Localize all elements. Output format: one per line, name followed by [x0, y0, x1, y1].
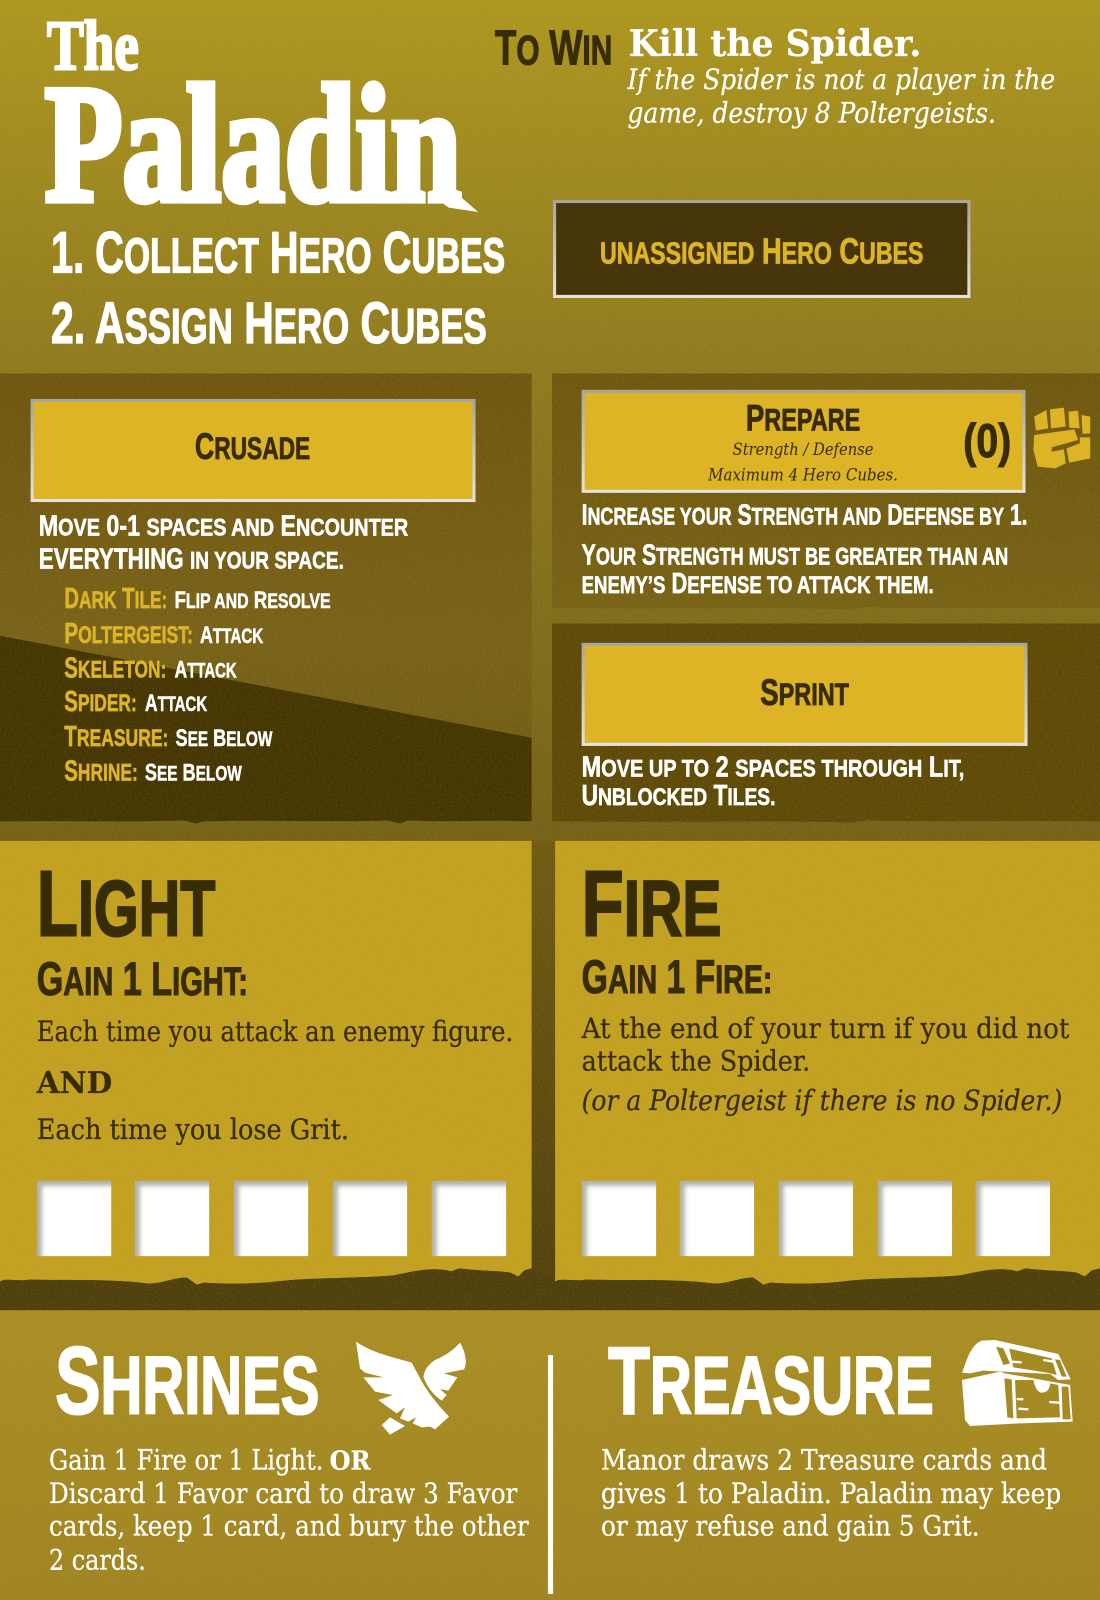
divider — [548, 1355, 553, 1594]
panel: bottom background — [0, 1310, 1100, 1600]
treasure text — [601, 1444, 1061, 1543]
light rules: AND — [36, 1065, 112, 1100]
crusade description — [39, 511, 409, 575]
icon: treasure chest — [962, 1340, 1073, 1426]
light rules: Each time you attack an enemy figure. — [37, 1016, 513, 1048]
panel: sprint background — [552, 623, 1100, 822]
sprint description: MOVE UP TO 2 SPACES THROUGH LIT, — [582, 752, 964, 784]
panel: light background — [0, 841, 532, 1285]
crusade description: MOVE 0-1 SPACES AND ENCOUNTER — [39, 511, 409, 543]
prepare card: Maximum 4 Hero Cubes. — [707, 466, 898, 485]
panel: shrines — [49, 1327, 529, 1576]
unassigned hero cubes box: UNASSIGNED HERO CUBES — [600, 231, 923, 271]
title — [45, 6, 477, 237]
light cube slots — [37, 1181, 513, 1263]
shrines text: OR — [330, 1445, 371, 1476]
encounter list: SEE BELOW — [145, 760, 242, 787]
panel: treasure — [601, 1327, 1073, 1543]
unassigned hero cubes box — [555, 202, 969, 296]
prepare description: INCREASE YOUR STRENGTH AND DEFENSE BY 1. — [582, 499, 1028, 531]
icon: eagle — [356, 1342, 466, 1435]
treasure text: or may refuse and gain 5 Grit. — [601, 1511, 980, 1543]
title: Paladin — [45, 52, 461, 237]
fire rules: (or a Poltergeist if there is no Spider.) — [582, 1085, 1062, 1117]
shrines text: Discard 1 Favor card to draw 3 Favor — [49, 1478, 518, 1510]
sprint description — [582, 752, 964, 812]
steps: 1. COLLECT HERO CUBES — [51, 220, 505, 285]
shrines text: Gain 1 Fire or 1 Light. — [49, 1444, 323, 1476]
encounter list: FLIP AND RESOLVE — [174, 587, 331, 614]
steps — [51, 220, 505, 356]
prepare card: PREPARE — [746, 398, 860, 439]
shrines text: 2 cards. — [49, 1544, 146, 1576]
encounter list: ATTACK — [174, 657, 237, 684]
shrines heading: SHRINES — [55, 1327, 319, 1434]
treasure text: gives 1 to Paladin. Paladin may keep — [601, 1478, 1061, 1510]
crusade card — [32, 401, 474, 501]
fire rules: At the end of your turn if you did not — [581, 1013, 1069, 1045]
encounter list: SEE BELOW — [176, 725, 273, 752]
panel: prepare background — [552, 373, 1100, 609]
light subheading: GAIN 1 LIGHT: — [37, 953, 248, 1005]
dark wave strip — [0, 1268, 1100, 1310]
shrines text — [49, 1444, 529, 1576]
encounter list: SKELETON: — [64, 653, 166, 685]
fire cube slots — [582, 1181, 1057, 1263]
win condition: Kill the Spider. — [629, 22, 921, 65]
prepare description — [582, 499, 1028, 600]
sprint description: UNBLOCKED TILES. — [582, 780, 776, 812]
panel: crusade background — [0, 373, 532, 823]
encounter list: ATTACK — [200, 622, 263, 649]
encounter list: ATTACK — [145, 690, 207, 717]
win condition: game, destroy 8 Poltergeists. — [628, 97, 996, 129]
treasure heading: TREASURE — [608, 1327, 934, 1434]
encounter list: DARK TILE: — [64, 583, 167, 615]
crusade description: EVERYTHING IN YOUR SPACE. — [39, 543, 344, 575]
encounter list — [64, 583, 331, 788]
fire heading: FIRE — [582, 852, 721, 956]
title: The — [47, 6, 139, 85]
fire subheading: GAIN 1 FIRE: — [582, 951, 772, 1003]
prepare card — [583, 391, 1024, 491]
win condition — [495, 21, 1055, 129]
treasure text: Manor draws 2 Treasure cards and — [601, 1444, 1047, 1476]
icon: fist — [1033, 408, 1090, 468]
win condition: If the Spider is not a player in the — [627, 64, 1055, 96]
encounter list: POLTERGEIST: — [64, 618, 193, 650]
sprint card — [583, 644, 1026, 744]
panel: fire — [581, 852, 1069, 1263]
steps: 2. ASSIGN HERO CUBES — [51, 291, 487, 356]
light rules — [36, 1016, 513, 1146]
fire rules — [581, 1013, 1069, 1117]
encounter list: TREASURE: — [64, 721, 168, 753]
panel: light — [36, 852, 513, 1263]
encounter list: SPIDER: — [64, 686, 137, 718]
fire rules: attack the Spider. — [582, 1045, 810, 1077]
panel: fire background — [555, 841, 1100, 1285]
light heading: LIGHT — [37, 852, 215, 956]
shrines text: cards, keep 1 card, and bury the other — [49, 1511, 529, 1543]
sprint card: SPRINT — [760, 672, 849, 713]
crusade card: CRUSADE — [195, 426, 310, 467]
gutter between light and fire — [532, 841, 555, 1310]
light rules: Each time you lose Grit. — [37, 1114, 349, 1146]
win condition: TO WIN — [495, 21, 612, 75]
prepare description: ENEMY’S DEFENSE TO ATTACK THEM. — [582, 568, 934, 600]
encounter list: SHRINE: — [64, 756, 138, 788]
prepare card: (0) — [963, 415, 1011, 467]
prepare card: Strength / Defense — [733, 440, 873, 459]
